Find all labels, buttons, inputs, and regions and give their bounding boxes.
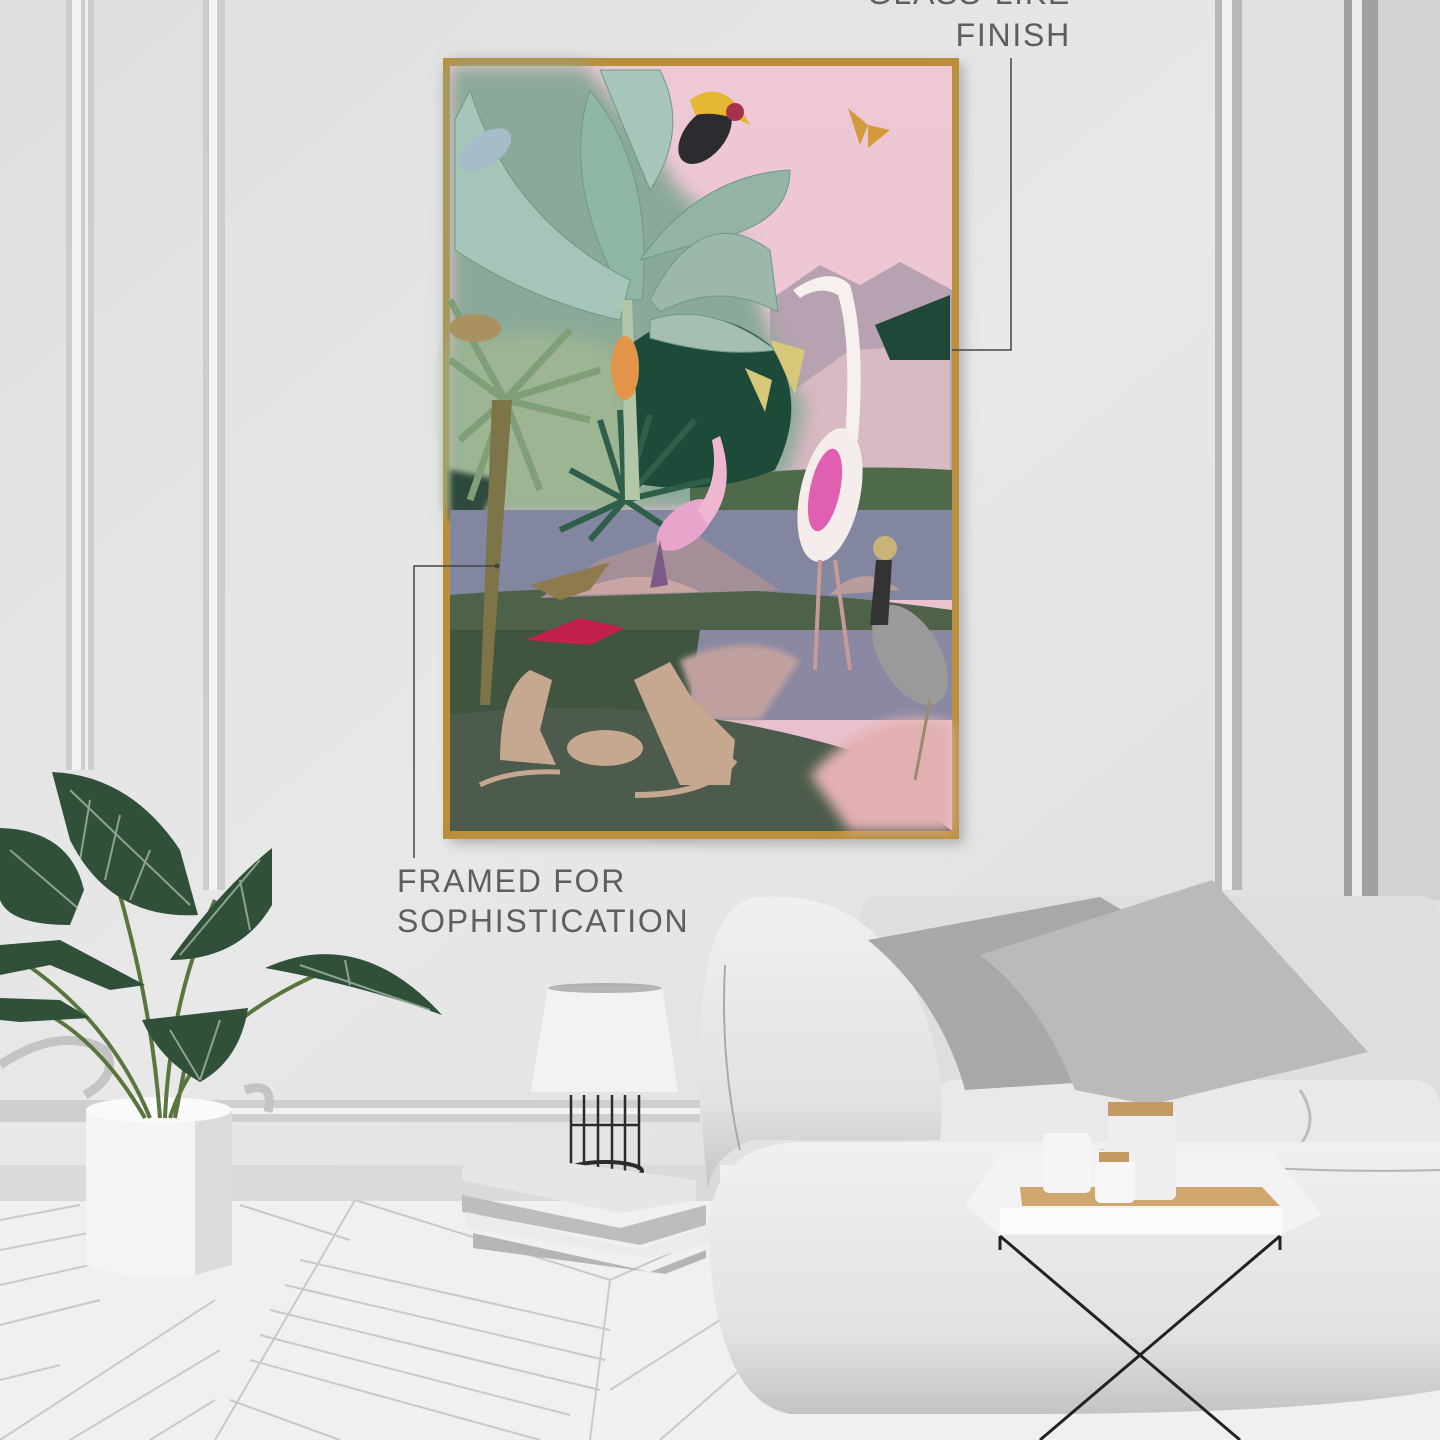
small jar bbox=[1095, 1160, 1135, 1203]
floor bbox=[0, 1165, 1440, 1440]
callout: framed for sophistication: FRAMED FOR bbox=[397, 863, 626, 899]
plant pot bbox=[86, 1097, 232, 1278]
palm trunk bbox=[480, 400, 512, 705]
blue bird bbox=[451, 120, 519, 180]
caladium leaves bbox=[745, 340, 805, 412]
butterfly bbox=[848, 108, 890, 148]
pink heron bbox=[647, 436, 727, 588]
sofa seat bbox=[930, 1080, 1440, 1200]
banana palm leaves bbox=[455, 70, 790, 352]
foliage mass bbox=[450, 66, 805, 510]
far bank bbox=[690, 468, 952, 515]
framed painting bbox=[443, 58, 963, 839]
callout: glass-like finish: FINISH bbox=[956, 17, 1071, 53]
sofa left arm bbox=[700, 896, 942, 1190]
jungle dark foliage bbox=[620, 318, 791, 488]
stem bbox=[622, 300, 640, 500]
foreground bbox=[450, 708, 952, 831]
wall mouldings bbox=[0, 0, 1378, 1122]
callout: glass-like finish bbox=[867, 0, 1071, 350]
cup bbox=[1043, 1133, 1091, 1193]
lizard bbox=[530, 562, 610, 600]
jerboas bbox=[480, 662, 735, 795]
monkey bbox=[449, 314, 501, 342]
palm fronds bbox=[450, 300, 600, 500]
large flamingo bbox=[787, 276, 873, 670]
pillows bbox=[868, 880, 1368, 1105]
agave bbox=[560, 410, 710, 540]
red ibis bbox=[525, 618, 625, 645]
tray table bbox=[965, 1102, 1322, 1440]
sofa back bbox=[700, 896, 1440, 1414]
orange flower bbox=[611, 336, 639, 400]
distant mountains bbox=[770, 262, 952, 480]
lake bbox=[450, 510, 952, 600]
stack of books bbox=[462, 1152, 708, 1274]
canvas sky bbox=[450, 66, 952, 831]
mid ground bbox=[450, 588, 952, 640]
painting shadow bbox=[450, 64, 964, 844]
callout: framed for sophistication bbox=[397, 564, 689, 939]
crowned crane bbox=[857, 536, 963, 780]
plant bbox=[0, 772, 442, 1118]
callout: framed for sophistication: SOPHISTICATION bbox=[397, 903, 689, 939]
jar bbox=[1108, 1110, 1176, 1200]
toucan bbox=[668, 92, 750, 174]
frame bbox=[443, 58, 959, 839]
sofa front cushion bbox=[708, 1142, 1440, 1414]
lamp bbox=[531, 983, 678, 1180]
